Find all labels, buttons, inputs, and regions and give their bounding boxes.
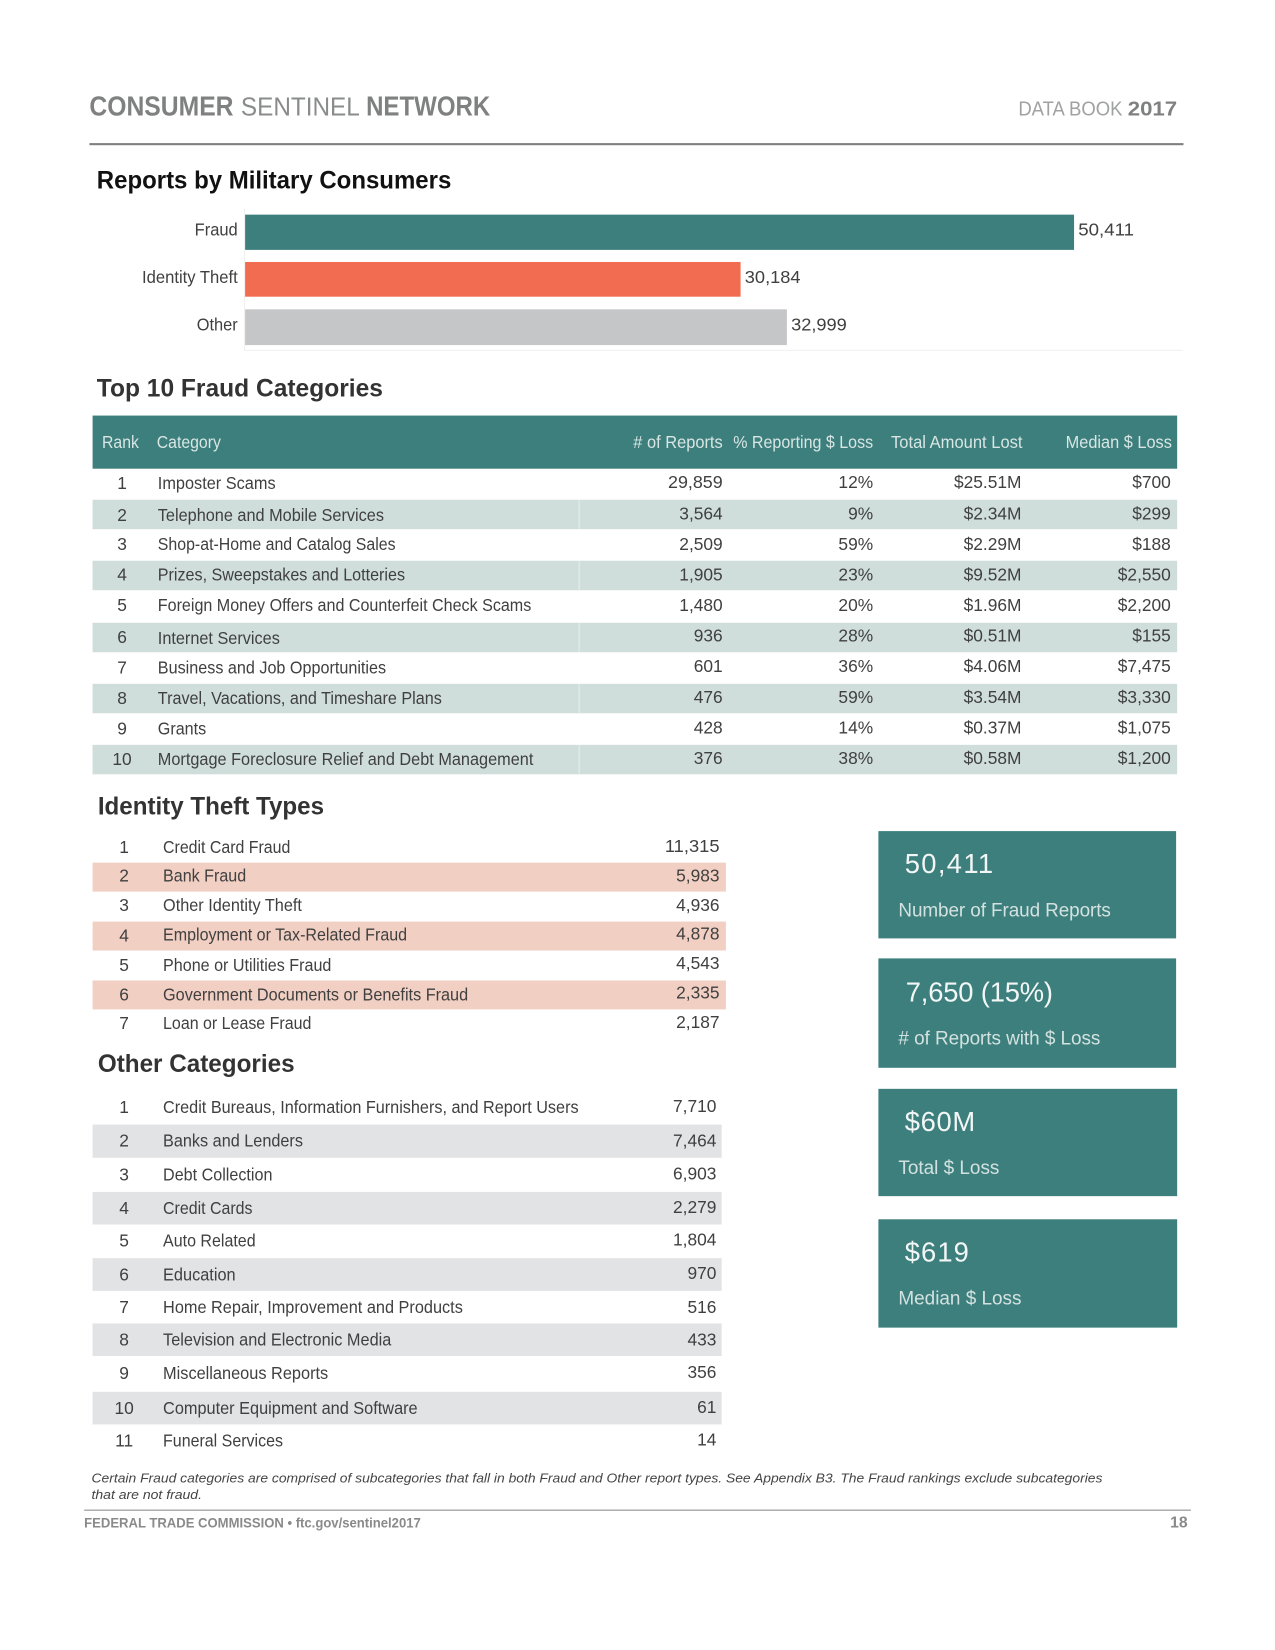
footnote: that are not fraud. — [92, 1487, 202, 1502]
row 9 — [117, 717, 1171, 738]
heading: reports by military consumers: Reports by Military Consumers — [97, 166, 451, 194]
row 3: 3 — [119, 1164, 129, 1184]
row 6: 28% — [838, 626, 873, 646]
page footer — [84, 1510, 1191, 1532]
row 7: 7 — [119, 1013, 129, 1033]
row 5: 1,804 — [673, 1230, 717, 1250]
row 3 — [119, 1163, 716, 1184]
row 5: 4,543 — [676, 953, 720, 973]
row 5 — [117, 595, 1171, 615]
row 7: Home Repair, Improvement and Products — [163, 1297, 463, 1317]
row 5: Phone or Utilities Fraud — [163, 955, 331, 975]
row 2 — [93, 1125, 722, 1158]
row 6 — [93, 1258, 722, 1291]
row 10: 10 — [112, 749, 132, 769]
row 5 — [119, 1230, 717, 1251]
stat card: fraud reports — [878, 831, 1176, 938]
row 7: Loan or Lease Fraud — [163, 1013, 311, 1033]
row 1: $25.51M — [954, 472, 1021, 492]
row 4 — [93, 1192, 722, 1225]
row 1: 11,315 — [665, 836, 720, 856]
row 6: 936 — [694, 626, 723, 646]
row 5: Auto Related — [163, 1231, 256, 1251]
row 8: Television and Electronic Media — [163, 1330, 392, 1350]
table: other categories — [93, 1096, 722, 1451]
row 8: Travel, Vacations, and Timeshare Plans — [158, 688, 442, 708]
row 1: 1 — [119, 1097, 129, 1117]
row 1: 1 — [117, 473, 127, 493]
row 7: $7,475 — [1118, 656, 1171, 676]
row 1: 7,710 — [673, 1096, 716, 1116]
row 1: Credit Card Fraud — [163, 837, 290, 857]
row 4: 4 — [117, 565, 127, 585]
table: identity theft types — [93, 836, 726, 1033]
row 4 — [93, 922, 726, 951]
row 2 — [93, 500, 1177, 529]
row 7: Business and Job Opportunities — [158, 657, 386, 677]
row 4: $2,550 — [1118, 565, 1171, 585]
row 3 — [119, 895, 720, 915]
table header row — [93, 416, 1177, 469]
bar: other — [197, 309, 847, 345]
row 6: 6 — [119, 1264, 129, 1284]
row 3: 2,509 — [679, 534, 723, 554]
row 1 — [119, 836, 720, 857]
bar: fraud: 50,411 — [1078, 220, 1134, 240]
row 11: Funeral Services — [163, 1431, 283, 1451]
stat card: total loss: $60M — [905, 1106, 975, 1137]
row 4: Employment or Tax-Related Fraud — [163, 925, 407, 945]
stat card: fraud reports: Number of Fraud Reports — [898, 900, 1111, 921]
row 4: Credit Cards — [163, 1198, 253, 1218]
table header row: Total Amount Lost — [891, 432, 1023, 452]
row 1: 12% — [838, 472, 873, 492]
footnote — [92, 1470, 1103, 1502]
page header — [89, 91, 1183, 145]
row 5: 5 — [117, 595, 127, 615]
row 7: 7 — [117, 657, 127, 677]
row 9: Grants — [158, 718, 206, 738]
bar: fraud — [195, 215, 1134, 250]
row 1: Imposter Scams — [158, 473, 276, 493]
row 11: 11 — [115, 1431, 133, 1451]
row 4: 4,878 — [676, 923, 720, 943]
row 4: $9.52M — [964, 565, 1021, 585]
table header row: # of Reports — [633, 432, 723, 452]
row 2: 9% — [848, 504, 873, 524]
row 2: 3,564 — [679, 504, 723, 524]
row 1: 29,859 — [668, 472, 723, 492]
row 6: $0.51M — [964, 626, 1021, 646]
row 4 — [93, 561, 1177, 590]
stat card: median loss: Median $ Loss — [898, 1288, 1021, 1309]
row 5 — [119, 953, 720, 975]
row 1: 1 — [119, 837, 129, 857]
row 6: 6 — [117, 627, 127, 647]
row 3: 59% — [838, 534, 873, 554]
row 5: Foreign Money Offers and Counterfeit Check Scams — [158, 595, 532, 615]
page footer: 18 — [1170, 1515, 1188, 1532]
heading: other categories: Other Categories — [98, 1050, 295, 1078]
stat card: median loss: $619 — [905, 1236, 969, 1267]
row 4: 23% — [838, 565, 873, 585]
stat card: total loss — [878, 1089, 1177, 1196]
page header: 2017 — [1128, 99, 1177, 121]
row 6 — [93, 980, 726, 1009]
bar: identity theft: Identity Theft — [142, 267, 238, 287]
row 2: 2 — [119, 866, 129, 886]
row 7: $4.06M — [964, 656, 1021, 676]
row 10: Mortgage Foreclosure Relief and Debt Management — [158, 749, 534, 769]
stat card: reports with loss — [878, 958, 1176, 1068]
row 8: 476 — [694, 687, 723, 707]
row 8: 433 — [687, 1330, 716, 1350]
heading: identity theft types: Identity Theft Types — [98, 792, 324, 820]
bar: fraud: Fraud — [195, 220, 238, 240]
row 6 — [93, 623, 1177, 652]
row 5: $2,200 — [1118, 595, 1171, 615]
row 10: $1,200 — [1118, 748, 1171, 768]
row 6: Internet Services — [158, 628, 280, 648]
stat card: median loss — [878, 1219, 1177, 1328]
row 5: 5 — [119, 1231, 129, 1251]
bar: identity theft: 30,184 — [745, 267, 801, 287]
row 8: 8 — [117, 688, 127, 708]
row 8 — [93, 684, 1177, 713]
table: top 10 fraud categories — [93, 416, 1177, 774]
row 9: 14% — [838, 717, 873, 737]
row 3: Debt Collection — [163, 1164, 272, 1184]
row 9: Miscellaneous Reports — [163, 1363, 329, 1383]
row 3: $188 — [1132, 534, 1171, 554]
row 10: 10 — [114, 1398, 134, 1418]
row 7: 516 — [687, 1297, 716, 1317]
row 3: Shop-at-Home and Catalog Sales — [158, 534, 396, 554]
heading: top 10 fraud categories: Top 10 Fraud Categories — [97, 375, 383, 403]
row 6: 2,335 — [676, 982, 720, 1002]
row 2: Bank Fraud — [163, 866, 246, 886]
table header row: % Reporting $ Loss — [733, 432, 873, 452]
row 2: $2.34M — [964, 504, 1021, 524]
row 9: $1,075 — [1118, 717, 1171, 737]
row 6: 6 — [119, 984, 129, 1004]
row 9: 9 — [117, 718, 127, 738]
row 1 — [117, 472, 1171, 493]
stat card: fraud reports: 50,411 — [905, 848, 993, 879]
row 2 — [93, 863, 726, 892]
row 10: $0.58M — [964, 748, 1021, 768]
row 7: 36% — [838, 656, 873, 676]
row 11 — [115, 1429, 717, 1451]
row 10: Computer Equipment and Software — [163, 1398, 418, 1418]
row 1: $700 — [1132, 472, 1171, 492]
row 4: 2,279 — [673, 1197, 716, 1217]
page header: DATA BOOK — [1018, 99, 1123, 121]
row 3: $2.29M — [964, 534, 1021, 554]
row 4: 1,905 — [679, 565, 723, 585]
table header row: Category — [157, 432, 221, 452]
row 8: $3,330 — [1118, 687, 1171, 707]
row 9: 9 — [119, 1363, 129, 1383]
bar: other: 32,999 — [791, 314, 847, 334]
row 10 — [93, 1392, 722, 1424]
row 2: 5,983 — [676, 866, 720, 886]
row 3: 3 — [119, 895, 129, 915]
row 5: 5 — [119, 955, 129, 975]
page header: SENTINEL — [241, 92, 360, 122]
stat card: reports with loss: # of Reports with $ Loss — [898, 1029, 1100, 1050]
row 6: Government Documents or Benefits Fraud — [163, 984, 468, 1004]
table header row: Median $ Loss — [1066, 432, 1172, 452]
row 8: 59% — [838, 687, 873, 707]
row 3: 6,903 — [673, 1163, 716, 1183]
row 4: 4 — [119, 926, 129, 946]
row 5: 20% — [838, 595, 873, 615]
row 8: 8 — [119, 1330, 129, 1350]
row 2: 2 — [119, 1131, 129, 1151]
row 5: 1,480 — [679, 595, 723, 615]
stat card: reports with loss: 7,650 (15%) — [906, 977, 1053, 1008]
row 2: Telephone and Mobile Services — [158, 505, 384, 525]
row 7: 7 — [119, 1297, 129, 1317]
row 1: Credit Bureaus, Information Furnishers, and Report Users — [163, 1097, 579, 1117]
row 6: $155 — [1132, 626, 1171, 646]
row 2: $299 — [1132, 504, 1171, 524]
row 2: 7,464 — [673, 1131, 717, 1151]
row 9: 428 — [694, 717, 723, 737]
page footer: FEDERAL TRADE COMMISSION • ftc.gov/sentinel2017 — [84, 1516, 421, 1531]
row 4: 4 — [119, 1198, 129, 1218]
page header: NETWORK — [366, 91, 490, 122]
row 5: $1.96M — [964, 595, 1021, 615]
row 8 — [93, 1323, 722, 1356]
row 10 — [93, 745, 1177, 774]
row 10: 376 — [694, 748, 723, 768]
header title: CONSUMER — [89, 91, 234, 122]
row 11: 14 — [697, 1429, 717, 1449]
row 10: 38% — [838, 748, 873, 768]
bar: other: Other — [197, 314, 238, 334]
row 7: 2,187 — [676, 1012, 720, 1032]
row 3: 4,936 — [676, 895, 720, 915]
row 7: 601 — [694, 656, 723, 676]
stat card: total loss: Total $ Loss — [898, 1158, 999, 1179]
row 7 — [117, 656, 1171, 677]
row 7 — [119, 1012, 720, 1033]
row 2: 2 — [117, 505, 127, 525]
row 6: Education — [163, 1264, 236, 1284]
row 3 — [117, 534, 1171, 554]
row 3: Other Identity Theft — [163, 895, 302, 915]
row 4: Prizes, Sweepstakes and Lotteries — [158, 565, 405, 585]
row 8: $3.54M — [964, 687, 1021, 707]
row 9: $0.37M — [964, 717, 1021, 737]
row 9: 356 — [687, 1362, 716, 1382]
bar: identity theft — [142, 262, 801, 297]
row 3: 3 — [117, 534, 127, 554]
table header row: Rank — [102, 432, 139, 452]
footnote: Certain Fraud categories are comprised of subcategories that fall in both Fraud and Other report types. See Appendix B3. The Fraud rankings exclude subcategories — [92, 1470, 1103, 1485]
row 7 — [119, 1297, 716, 1317]
bar chart: reports by military consumers — [142, 208, 1182, 351]
row 2: Banks and Lenders — [163, 1131, 303, 1151]
row 10: 61 — [697, 1397, 716, 1417]
row 6: 970 — [687, 1263, 716, 1283]
row 9 — [119, 1362, 716, 1383]
